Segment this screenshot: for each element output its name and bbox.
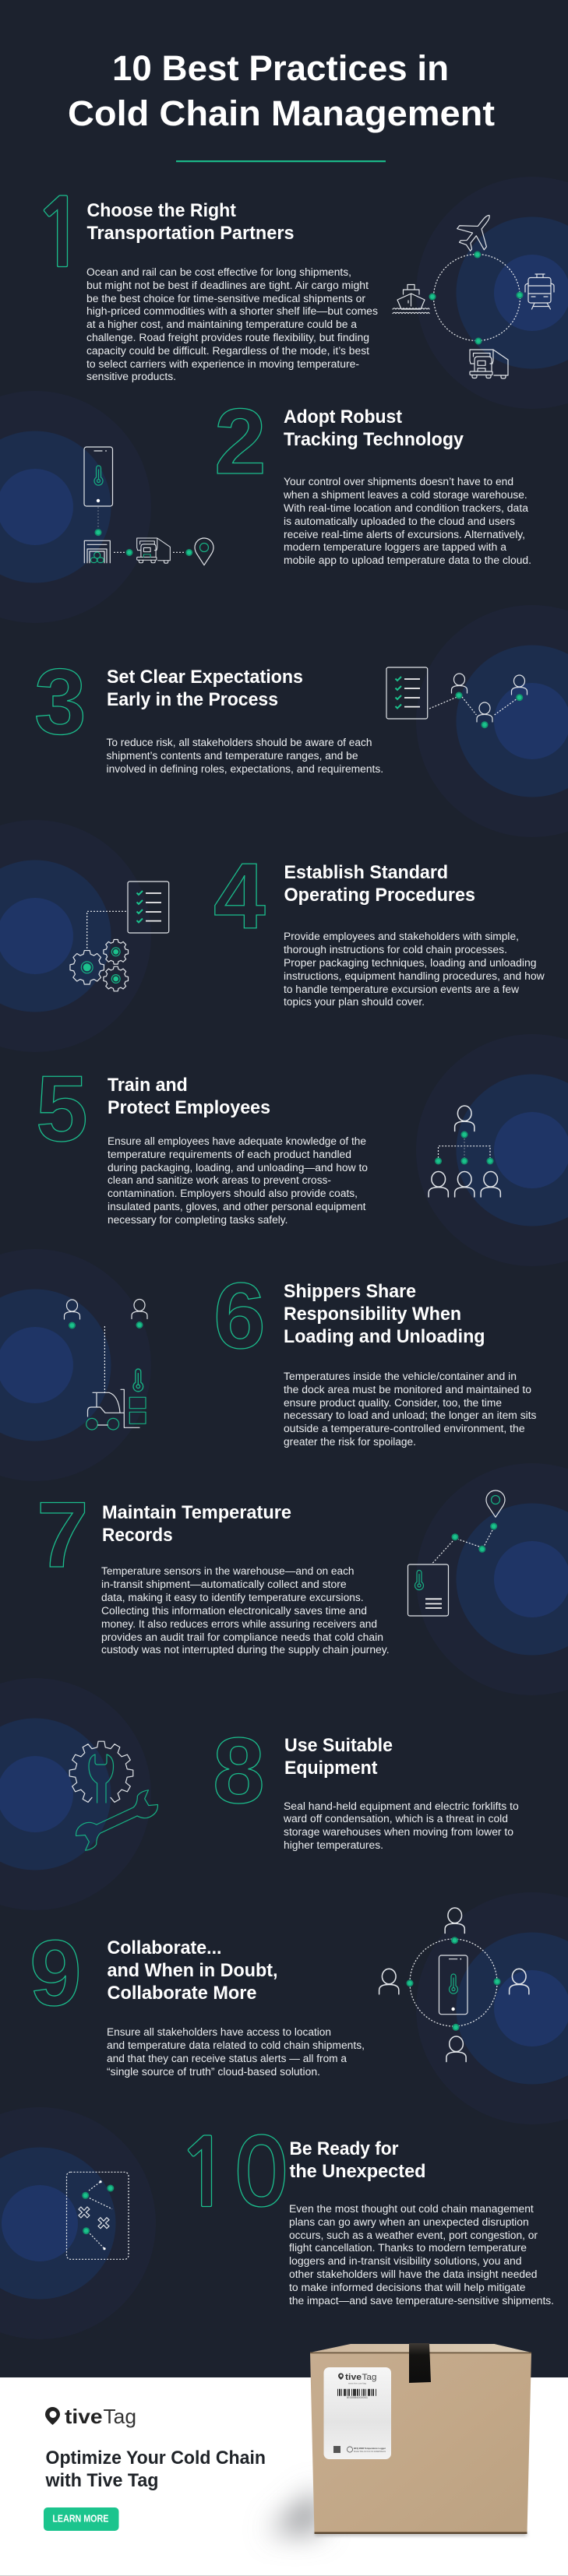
- body text: capacity could be difficult. Regardless of the mode, it’s best: [86, 345, 369, 357]
- body text: Collecting this information electronically saves time and: [101, 1605, 367, 1617]
- heading: [290, 2138, 425, 2182]
- number 7: 7: [37, 1483, 89, 1587]
- shipping label: www.tive.com/tag: [348, 2381, 366, 2384]
- footer white background: [0, 2377, 568, 2576]
- heading: [102, 1502, 291, 1546]
- heading: Transportation Partners: [87, 223, 295, 244]
- body text: when a shipment leaves a cold storage warehouse.: [283, 489, 527, 501]
- button: learn more: [44, 2507, 118, 2531]
- icon: phone with thermometer: [84, 447, 112, 506]
- body text: To reduce risk, all stakeholders should be aware of each: [106, 737, 372, 748]
- icon: phone with thermometer: [439, 1955, 467, 2015]
- icon: truck: [470, 350, 508, 378]
- icon: plane: [451, 205, 503, 257]
- body text: to handle temperature excursion events are a few: [284, 984, 519, 995]
- body text: Ensure all employees have adequate knowledge of the: [108, 1135, 366, 1147]
- icon: contingency plan board: [67, 2172, 129, 2259]
- icon: checklist and gears: [70, 882, 169, 991]
- body text: sensitive products.: [86, 371, 176, 382]
- icon: forklift and workers: [64, 1299, 147, 1430]
- body text: Ensure all stakeholders have access to location: [107, 2026, 331, 2038]
- body text: occurs, such as a weather event, port congestion, or: [289, 2229, 538, 2241]
- body text: [284, 931, 545, 1008]
- heading: Responsibility When: [284, 1304, 461, 1325]
- panel: section 10: [67, 2127, 554, 2307]
- body text: mobile app to upload temperature data to the cloud.: [284, 554, 531, 566]
- heading: Be Ready for: [290, 2138, 399, 2159]
- body text: contamination. Employers should also provide coats,: [108, 1188, 358, 1199]
- heading: Choose the Right: [87, 200, 236, 221]
- body text: Even the most thought out cold chain management: [289, 2203, 534, 2215]
- body text: thorough instructions for cold chain processes.: [284, 944, 507, 955]
- body text: money. It also reduces errors while assuring receivers and: [101, 1618, 377, 1630]
- icon: people with nodes: [429, 674, 527, 728]
- panel: section 6: [64, 1264, 537, 1448]
- shipping label: IE00084000001: [347, 2396, 368, 2399]
- body text: to select carriers with experience in moving temperature-: [86, 358, 359, 370]
- body text: topics your plan should cover.: [284, 996, 425, 1008]
- number 2: 2: [214, 389, 266, 494]
- icon: tracking flow: [84, 447, 213, 565]
- body text: storage warehouses when moving from lower to: [284, 1826, 513, 1838]
- heading: Records: [102, 1525, 173, 1546]
- body text: is automatically uploaded to the cloud and users: [284, 516, 515, 527]
- title: Cold Chain Management: [68, 93, 495, 133]
- footer heading: [45, 2448, 266, 2491]
- body text: [108, 1135, 368, 1226]
- body text: [86, 266, 378, 382]
- body text: necessary to load and unload; the longer an item sits: [284, 1409, 537, 1421]
- body text: flight cancellation. Thanks to modern temperature: [289, 2242, 527, 2254]
- icon: truck: [137, 538, 170, 563]
- icon: location pin: [195, 538, 213, 565]
- body text: ward off condensation, which is a threat in cold: [283, 1813, 508, 1825]
- body text: Your control over shipments doesn’t have to end: [284, 476, 513, 487]
- heading: Protect Employees: [108, 1097, 270, 1118]
- heading: [108, 1937, 277, 2004]
- heading: [284, 862, 475, 906]
- number 10: 10: [176, 2127, 289, 2220]
- number 3: 3: [34, 649, 86, 754]
- shipping label: BFQ 2896 Temperature Logger: [354, 2447, 386, 2450]
- icon: checklist: [386, 667, 428, 719]
- number 6: 6: [213, 1264, 266, 1368]
- icon: shared phone and stakeholders: [379, 1908, 529, 2062]
- number 9: 9: [30, 1921, 82, 2025]
- body text: provides an audit trail for compliance needs that cold chain: [101, 1631, 383, 1643]
- heading: Train and: [108, 1075, 188, 1096]
- icon: location pin: [486, 1490, 505, 1517]
- footer heading: Optimize Your Cold Chain: [45, 2448, 266, 2469]
- panel: section 4: [70, 844, 545, 1008]
- number 1: 1: [32, 188, 89, 280]
- panel: section 1: [32, 188, 554, 382]
- heading: Tracking Technology: [284, 429, 464, 450]
- heading: Equipment: [284, 1758, 377, 1779]
- heading: Maintain Temperature: [102, 1502, 291, 1523]
- panel: section 8: [69, 1719, 519, 1853]
- icon: warehouse: [84, 540, 110, 563]
- body text: clean and sanitize work areas to prevent cross-: [108, 1174, 331, 1186]
- heading: and When in Doubt,: [108, 1960, 277, 1981]
- body text: greater the risk for spoilage.: [284, 1436, 416, 1448]
- icon: checklist: [128, 882, 169, 933]
- body text: custody was not interrupted during the supply chain journey.: [101, 1644, 390, 1656]
- heading: Adopt Robust: [284, 406, 402, 428]
- icon: ship: [393, 285, 429, 313]
- cardboard box: [310, 2343, 531, 2534]
- panel: section 2: [84, 389, 531, 566]
- body text: to make informed decisions that will help mitigate: [289, 2282, 525, 2293]
- icon: small gear top: [104, 939, 129, 964]
- body text: insulated pants, gloves, and other personal equipment: [108, 1201, 366, 1212]
- icon: gear and wrenches: [69, 1741, 163, 1853]
- body text: [107, 2026, 365, 2078]
- body text: the impact—and save temperature-sensitive shipments.: [289, 2295, 554, 2307]
- body text: [106, 737, 383, 775]
- heading: Early in the Process: [107, 689, 278, 710]
- body text: involved in defining roles, expectations, and requirements.: [106, 763, 383, 775]
- title: 10 Best Practices in: [112, 48, 449, 88]
- body text: data, making it easy to identify temperature excursions.: [101, 1592, 364, 1603]
- number 8: 8: [213, 1719, 265, 1823]
- logo: tiveTag: Tag: [103, 2405, 136, 2428]
- box shadow: [269, 2488, 527, 2536]
- body text: high-priced commodities with a shorter shelf life—but comes: [86, 305, 378, 317]
- heading: [87, 200, 295, 244]
- heading: Collaborate More: [108, 1983, 257, 2004]
- panel: section 5: [36, 1057, 500, 1226]
- body text: [283, 1800, 519, 1851]
- icon: large gear: [70, 951, 104, 984]
- heading: [107, 667, 303, 710]
- body text: [284, 1371, 537, 1448]
- body text: shipment’s contents and temperature ranges, and be: [106, 750, 358, 762]
- number 5: 5: [36, 1057, 88, 1161]
- body text: Provide employees and stakeholders with simple,: [284, 931, 519, 942]
- body text: Temperature sensors in the warehouse—and on each: [101, 1565, 354, 1577]
- heading: Use Suitable: [284, 1735, 393, 1756]
- icon: spanner: [71, 1788, 163, 1853]
- body text: higher temperatures.: [284, 1839, 383, 1851]
- body text: at a higher cost, and maintaining temperature could be a: [86, 318, 357, 330]
- body text: temperature requirements of each product handled: [108, 1149, 351, 1160]
- logo: tiveTag: [45, 2405, 136, 2428]
- icon: document: [408, 1564, 449, 1616]
- panel: section 3: [34, 649, 527, 775]
- icon: org chart of people: [429, 1106, 500, 1197]
- body text: instructions, equipment handling procedures, and how: [284, 970, 545, 982]
- body text: Seal hand-held equipment and electric forklifts to: [284, 1800, 519, 1812]
- body text: and temperature data related to cold chain shipments,: [107, 2039, 365, 2051]
- shipping label: tive: [345, 2373, 362, 2382]
- title: [68, 48, 495, 133]
- panel: section 9: [30, 1908, 529, 2078]
- body text: during packaging, loading, and unloading—and how to: [108, 1162, 368, 1174]
- body text: other stakeholders will have the data insight needed: [289, 2268, 538, 2280]
- heading: [108, 1075, 270, 1118]
- heading: Operating Procedures: [284, 885, 475, 906]
- tape: [409, 2343, 431, 2383]
- body text: but might not be best if deadlines are tight. Air cargo might: [86, 280, 369, 291]
- body text: necessary for completing tasks safely.: [108, 1214, 288, 1226]
- logo: tiveTag: tive: [65, 2405, 103, 2428]
- body text: modern temperature loggers are tapped with a: [284, 541, 506, 553]
- body text: loggers and in-transit visibility solutions, you and: [289, 2255, 522, 2267]
- footer heading: with Tive Tag: [45, 2470, 159, 2491]
- icon: checklist and people: [386, 667, 527, 728]
- panel: section 7: [37, 1483, 505, 1656]
- panel: footer: [0, 2343, 568, 2576]
- body text: in-transit shipment—automatically collect and store: [101, 1578, 347, 1590]
- heading: [284, 1735, 393, 1779]
- body text: challenge. Road freight provides route flexibility, but finding: [86, 332, 369, 343]
- body text: “single source of truth” cloud-based solution.: [107, 2066, 320, 2078]
- body text: With real-time location and condition trackers, data: [284, 502, 528, 514]
- shipping label: Model TAG-01 FCC ID 2ASE8TAG01: [354, 2450, 386, 2453]
- heading: Establish Standard: [284, 862, 448, 883]
- shipping label: Tag: [362, 2373, 377, 2382]
- body text: the dock area must be monitored and maintained to: [284, 1384, 531, 1395]
- button: learn more: LEARN MORE: [52, 2514, 108, 2525]
- heading: the Unexpected: [290, 2161, 425, 2182]
- icon: transport modes ring: [393, 205, 554, 378]
- heading: Collaborate...: [108, 1937, 221, 1958]
- body text: [101, 1565, 390, 1656]
- icon: train: [525, 274, 554, 309]
- body text: outside a temperature-controlled environment, the: [284, 1423, 525, 1434]
- icon: temperature record route: [408, 1490, 505, 1616]
- body text: and that they can receive status alerts — all from a: [107, 2053, 347, 2064]
- heading: [284, 1281, 485, 1347]
- icon: small gear bottom: [104, 966, 129, 991]
- icon: gear with wrench: [69, 1741, 133, 1803]
- body text: [289, 2203, 554, 2307]
- number 4: 4: [213, 844, 266, 948]
- heading: Shippers Share: [284, 1281, 416, 1302]
- body text: be the best choice for time-sensitive medical shipments or: [86, 293, 366, 304]
- body text: Temperatures inside the vehicle/container and in: [284, 1371, 517, 1382]
- heading: [284, 406, 464, 450]
- body text: [283, 476, 531, 566]
- body text: Proper packaging techniques, loading and unloading: [284, 957, 536, 969]
- body text: Ocean and rail can be cost effective for long shipments,: [86, 266, 351, 278]
- heading: Set Clear Expectations: [107, 667, 303, 688]
- shipping label: [324, 2367, 391, 2459]
- body text: receive real-time alerts of excursions. Alternatively,: [284, 529, 525, 540]
- body text: ensure product quality. Consider, too, the time: [284, 1397, 502, 1409]
- body text: plans can go awry when an unexpected disruption: [289, 2216, 529, 2228]
- heading: Loading and Unloading: [284, 1326, 485, 1347]
